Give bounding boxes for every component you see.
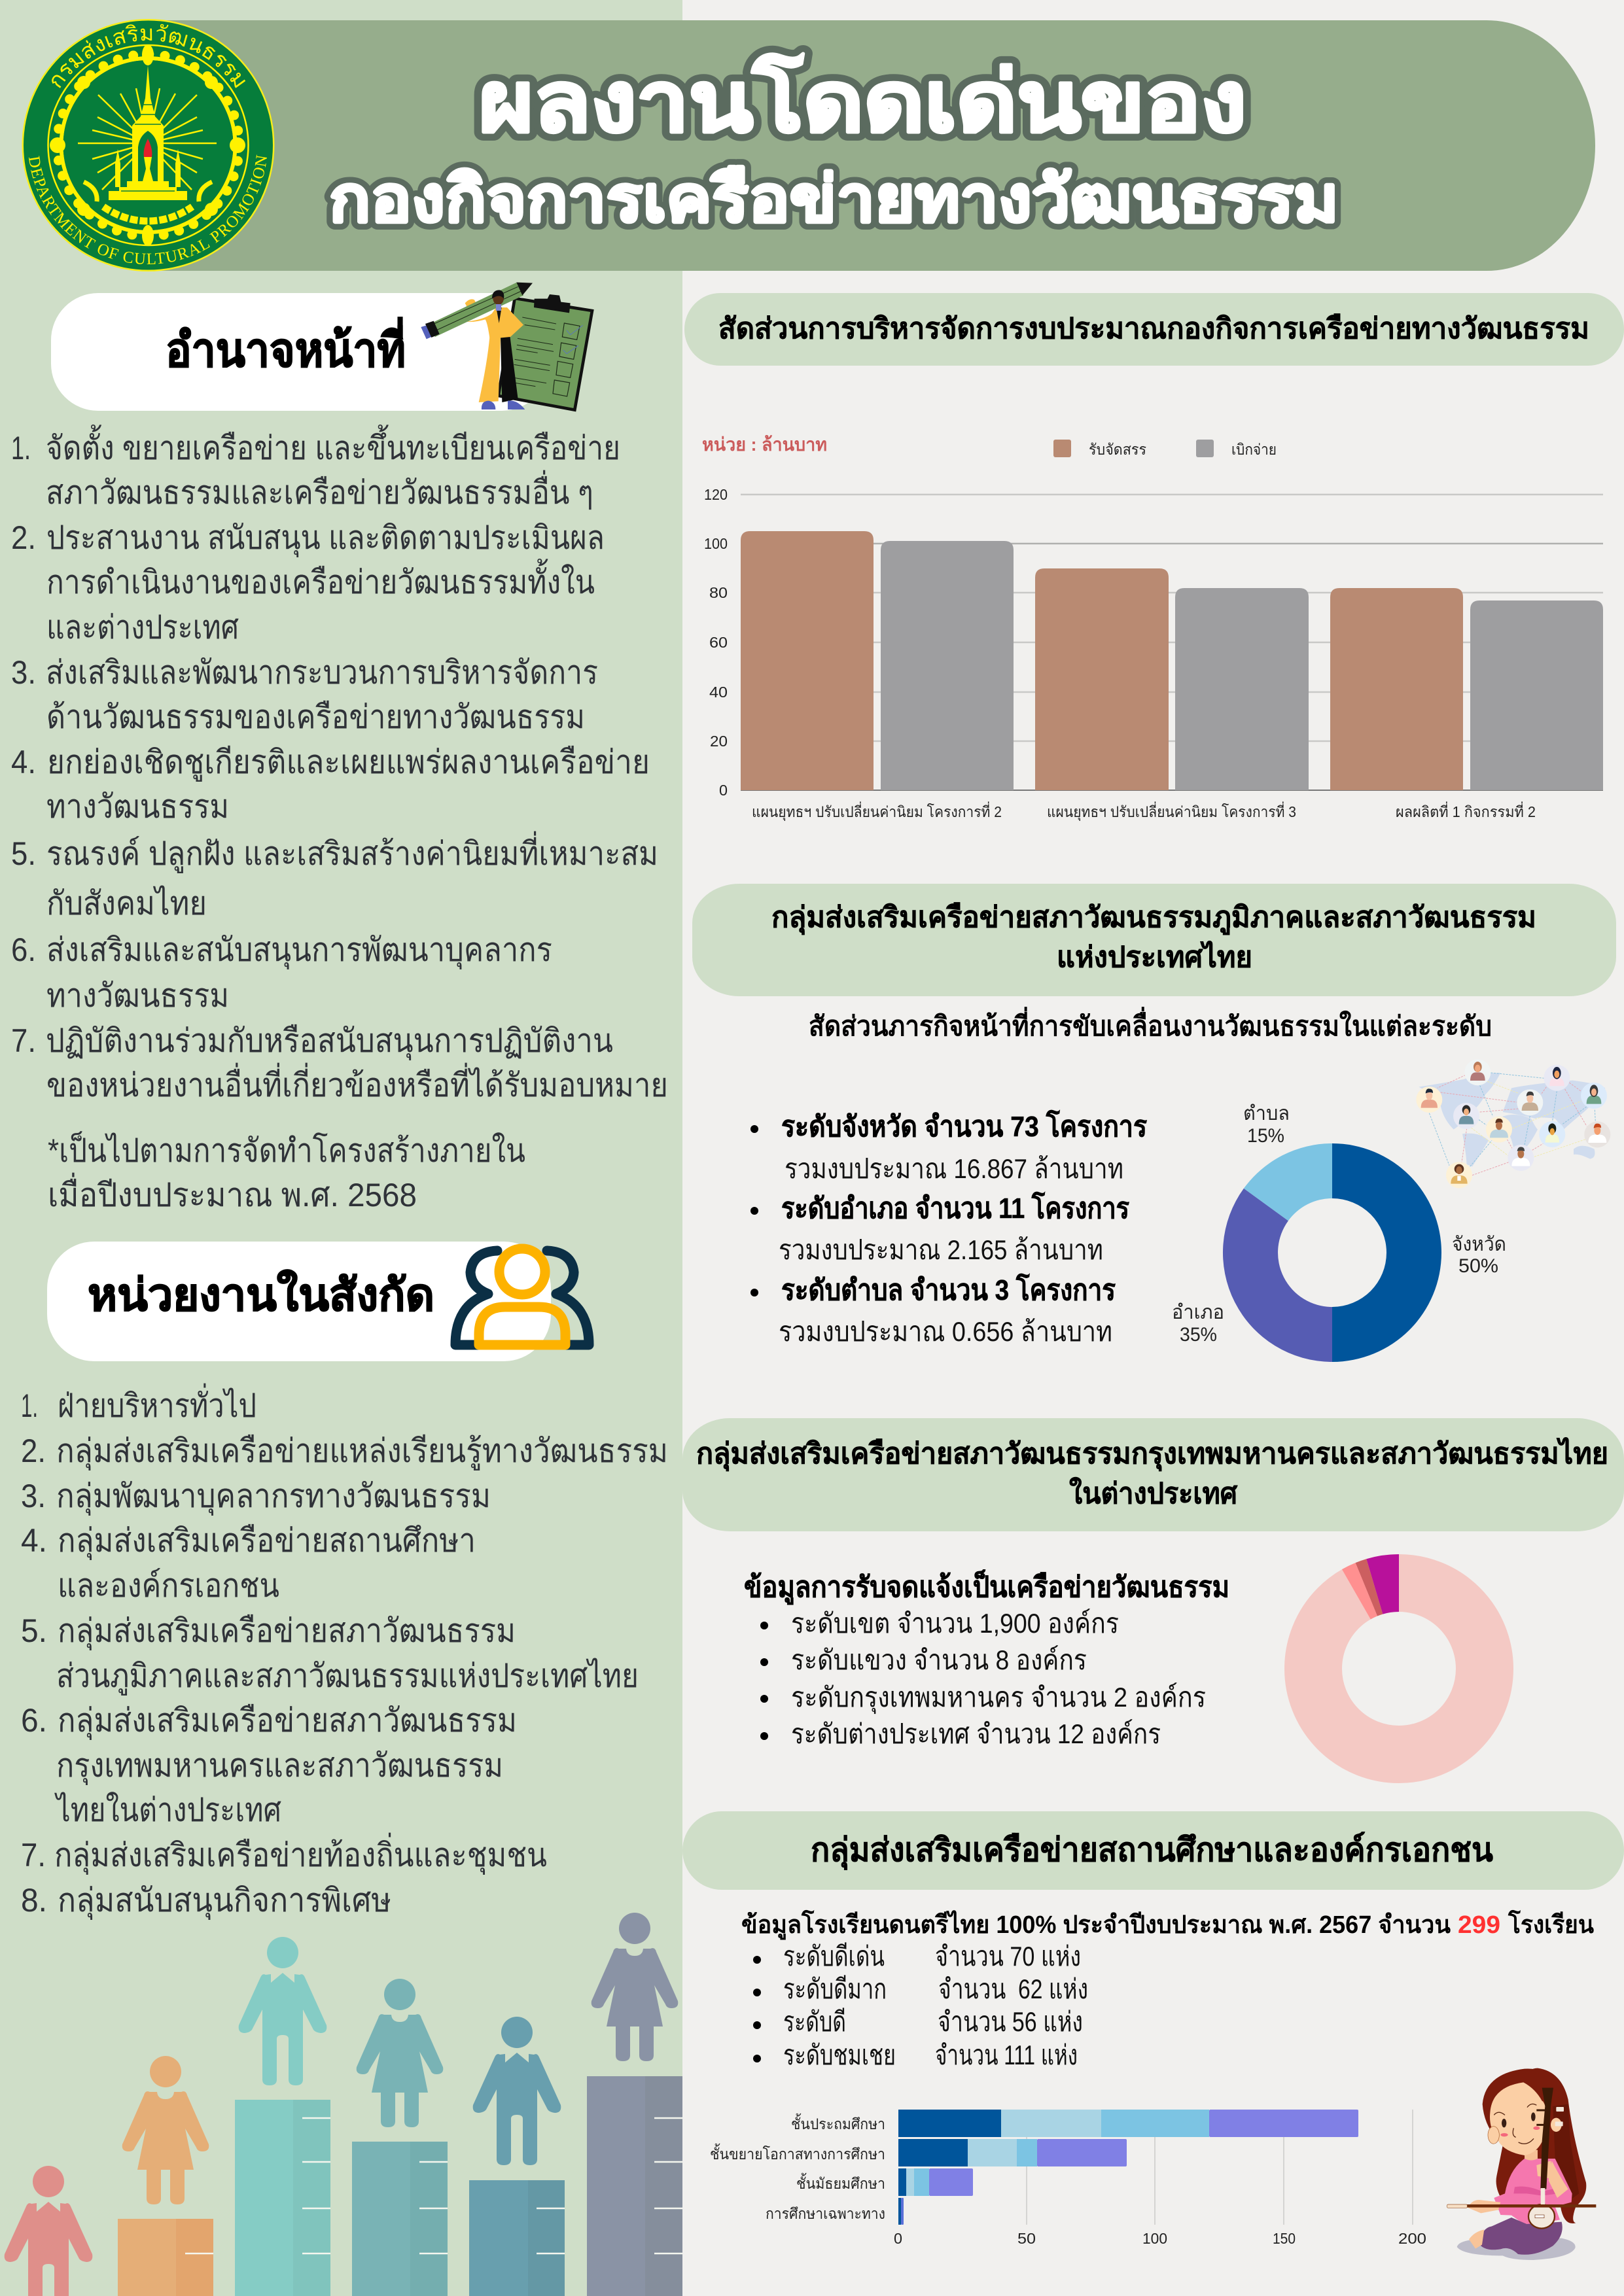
heading: schools and private organizations group: กลุ่มส่งเสริมเครือข่ายสถานศึกษาและองค์กรเอกชน: [811, 1832, 1493, 1870]
chart: donut of levels: 35%: [1180, 1324, 1217, 1346]
title: ผลงานโดดเด่นของ: [479, 53, 1246, 149]
text block: projects by level: ระดับอำเภอ จำนวน 11 โครงการ: [781, 1191, 1129, 1225]
text block: list of powers and duties: กับสังคมไทย: [46, 885, 207, 922]
bar: secondary: [898, 2168, 973, 2196]
text block: Thai music schools data: จำนวน 56 แห่ง: [938, 2006, 1083, 2037]
text block: list of subordinate units: กลุ่มส่งเสริมเครือข่ายสถานศึกษา: [58, 1522, 476, 1560]
panel: powers heading pill: อำนาจหน้าที่: [166, 317, 406, 377]
text block: Thai music schools data: โรงเรียน: [1508, 1909, 1594, 1939]
text block: Thai music schools data: ระดับดี: [783, 2006, 846, 2037]
text block: Thai music schools data: จำนวน 70 แห่ง: [935, 1941, 1081, 1972]
bar: primary: [898, 2110, 1358, 2137]
note: restructuring footnote: [48, 1131, 525, 1213]
text block: list of powers and duties: สภาวัฒนธรรมและเครือข่ายวัฒนธรรมอื่น ๆ: [46, 470, 593, 511]
text block: list of subordinate units: กลุ่มส่งเสริมเครือข่ายท้องถิ่นและชุมชน: [54, 1833, 547, 1875]
x axis labels: แผนยุทธฯ ปรับเปลี่ยนค่านิยม โครงการที่ 3: [1047, 801, 1296, 821]
text block: list of subordinate units: กลุ่มส่งเสริมเครือข่ายแหล่งเรียนรู้ทางวัฒนธรรม: [56, 1433, 668, 1470]
text block: projects by level: ระดับตำบล จำนวน 3 โครงการ: [781, 1272, 1116, 1306]
text block: Thai music schools data: ระดับชมเชย: [783, 2040, 896, 2070]
text block: list of powers and duties: รณรงค์ ปลูกฝัง และเสริมสร้างค่านิยมที่เหมาะสม: [46, 831, 658, 873]
legend: รับจัดสรร: [1089, 441, 1146, 458]
text block: list of subordinate units: ไทยในต่างประเทศ: [54, 1792, 281, 1828]
chart: stacked bars of schools by education level: [710, 2110, 1426, 2247]
legend: [1053, 440, 1277, 458]
text block: list of subordinate units: 2.: [21, 1433, 46, 1469]
chart: donut of registered networks: [1313, 1554, 1485, 1754]
text block: projects by level: ระดับจังหวัด จำนวน 73 โครงการ: [781, 1109, 1147, 1143]
panel: powers heading pill: [51, 293, 549, 411]
text block: projects by level: รวมงบประมาณ 0.656 ล้านบาท: [779, 1316, 1112, 1347]
text block: list of powers and duties: ของหน่วยงานอื่นที่เกี่ยวข้องหรือที่ได้รับมอบหมาย: [46, 1063, 668, 1104]
text block: list of powers and duties: จัดตั้ง ขยายเครือข่าย และขึ้นทะเบียนเครือข่าย: [46, 425, 620, 466]
category labels: [710, 2113, 885, 2222]
text block: list of subordinate units: กลุ่มส่งเสริมเครือข่ายสภาวัฒนธรรม: [58, 1612, 516, 1650]
text block: list of subordinate units: กรุงเทพมหานครและสภาวัฒนธรรม: [56, 1747, 503, 1785]
heading: bangkok and overseas cultural councils group: กลุ่มส่งเสริมเครือข่ายสภาวัฒนธรรมกรุงเทพมหานครและสภาวัฒนธรรมไทย: [696, 1436, 1608, 1472]
text block: list of powers and duties: 2.: [11, 519, 36, 556]
heading: budget management: [684, 293, 1624, 366]
text block: registered cultural networks: ข้อมูลการรับจดแจ้งเป็นเครือข่ายวัฒนธรรม: [744, 1569, 1229, 1605]
illustration: people standing on rising bars: [5, 1913, 682, 2296]
text block: list of powers and duties: ประสานงาน สนับสนุน และติดตามประเมินผล: [46, 519, 605, 557]
text block: registered cultural networks: ระดับกรุงเทพมหานคร จำนวน 2 องค์กร: [791, 1682, 1206, 1714]
text block: list of subordinate units: กลุ่มพัฒนาบุคลากรทางวัฒนธรรม: [56, 1478, 491, 1516]
logo: department of cultural promotion seal: DEPARTMENT OF CULTURAL PROMOTION: [29, 154, 267, 264]
text block: Thai music schools data: จำนวน 111 แห่ง: [935, 2040, 1078, 2070]
y axis labels: 120: [704, 486, 728, 503]
heading: budget management: สัดส่วนการบริหารจัดการงบประมาณกองกิจการเครือข่ายทางวัฒนธรรม: [718, 313, 1589, 345]
text block: list of powers and duties: การดำเนินงานของเครือข่ายวัฒนธรรมทั้งใน: [46, 559, 595, 600]
category labels: ชั้นประถมศึกษา: [791, 2113, 885, 2132]
subheading: mission share by level: สัดส่วนภารกิจหน้าที่การขับเคลื่อนงานวัฒนธรรมในแต่ละระดับ: [809, 1007, 1492, 1041]
title: [329, 53, 1339, 235]
value axis labels: 0: [894, 2230, 902, 2247]
text block: list of subordinate units: ฝ่ายบริหารทั่วไป: [58, 1383, 256, 1424]
note: restructuring footnote: เมื่อปีงบประมาณ พ.ศ. 2568: [48, 1173, 417, 1213]
y axis labels: [704, 486, 728, 799]
x axis labels: ผลผลิตที่ 1 กิจกรรมที่ 2: [1396, 801, 1536, 820]
text block: list of powers and duties: 1.: [11, 430, 31, 466]
value axis labels: 150: [1273, 2230, 1296, 2247]
text block: list of powers and duties: ด้านวัฒนธรรมของเครือข่ายทางวัฒนธรรม: [46, 699, 585, 735]
chart: donut of levels: ตำบล: [1243, 1103, 1290, 1124]
text block: list of subordinate units: 5.: [21, 1612, 47, 1649]
text block: list of powers and duties: 3.: [11, 654, 36, 691]
title: กองกิจการเครือข่ายทางวัฒนธรรม: [329, 163, 1339, 235]
y axis labels: 100: [704, 535, 728, 552]
text block: list of subordinate units: กลุ่มส่งเสริมเครือข่ายสภาวัฒนธรรม: [58, 1702, 517, 1740]
text block: list of subordinate units: 8.: [21, 1882, 47, 1919]
text block: list of subordinate units: 6.: [21, 1702, 47, 1739]
text block: registered cultural networks: ระดับเขต จำนวน 1,900 องค์กร: [791, 1608, 1119, 1639]
chart: donut of levels: 15%: [1247, 1125, 1284, 1147]
text block: Thai music schools data: [741, 1909, 1594, 2070]
legend: เบิกจ่าย: [1231, 441, 1277, 458]
bar: extended opportunity: [898, 2139, 1127, 2166]
text block: list of subordinate units: 1.: [21, 1387, 38, 1424]
y axis labels: 20: [710, 733, 728, 750]
category labels: ชั้นมัธยมศึกษา: [796, 2173, 885, 2192]
text block: list of powers and duties: ส่งเสริมและพัฒนากระบวนการบริหารจัดการ: [46, 654, 598, 691]
illustration: people network on world map: [1416, 1059, 1610, 1188]
text block: list of subordinate units: [21, 1383, 668, 1920]
heading: bangkok and overseas cultural councils group: ในต่างประเทศ: [1069, 1476, 1238, 1510]
panel: subordinate units heading pill: [47, 1242, 551, 1361]
chart: donut of levels: 50%: [1458, 1255, 1498, 1277]
text block: Thai music schools data: จำนวน 62 แห่ง: [938, 1974, 1088, 2004]
text block: list of powers and duties: ทางวัฒนธรรม: [46, 977, 229, 1014]
heading: bangkok and overseas cultural councils group: [682, 1418, 1624, 1531]
value axis labels: [894, 2230, 1426, 2247]
text block: Thai music schools data: ระดับดีมาก: [783, 1974, 887, 2004]
value axis labels: 100: [1142, 2230, 1167, 2247]
category labels: การศึกษาเฉพาะทาง: [766, 2205, 885, 2222]
header banner: [148, 20, 1595, 271]
text block: list of powers and duties: ยกย่องเชิดชูเกียรติและเผยแพร่ผลงานเครือข่าย: [47, 744, 650, 782]
text block: Thai music schools data: ระดับดีเด่น: [783, 1941, 885, 1972]
chart: donut of levels: อำเภอ: [1172, 1302, 1224, 1323]
chart: donut of levels: จังหวัด: [1452, 1234, 1506, 1255]
text block: list of subordinate units: 7.: [21, 1837, 46, 1873]
text block: registered cultural networks: ระดับแขวง จำนวน 8 องค์กร: [791, 1644, 1087, 1675]
text block: list of powers and duties: 4.: [11, 744, 36, 780]
text block: list of powers and duties: ปฏิบัติงานร่วมกับหรือสนับสนุนการปฏิบัติงาน: [46, 1022, 613, 1060]
text block: list of powers and duties: ส่งเสริมและสนับสนุนการพัฒนาบุคลากร: [46, 931, 552, 969]
text block: list of subordinate units: และองค์กรเอกชน: [58, 1567, 279, 1604]
y axis labels: 80: [709, 584, 728, 601]
y axis labels: 40: [709, 684, 728, 701]
text block: Thai music schools data: ข้อมูลโรงเรียนดนตรีไทย 100% ประจำปีงบประมาณ พ.ศ. 2567 จำนวน: [741, 1909, 1451, 1940]
panel: subordinate units heading pill: หน่วยงานในสังกัด: [88, 1269, 434, 1320]
chart: budget bar chart: [702, 434, 1603, 821]
heading: regional cultural councils group: กลุ่มส่งเสริมเครือข่ายสภาวัฒนธรรมภูมิภาคและสภาวัฒนธรรม: [771, 901, 1536, 935]
value axis labels: 200: [1398, 2230, 1426, 2247]
bar: specialised: [898, 2198, 904, 2225]
logo: department of cultural promotion seal: กรมส่งเสริมวัฒนธรรม: [52, 24, 246, 88]
bars: [741, 531, 1603, 790]
text block: list of powers and duties: 5.: [11, 835, 36, 872]
value axis labels: 50: [1017, 2230, 1036, 2247]
title: ผลงานโดดเด่นของ: [479, 53, 1246, 149]
text block: registered cultural networks: [744, 1569, 1229, 1749]
text block: list of powers and duties: และต่างประเทศ: [46, 609, 239, 646]
text block: list of powers and duties: 6.: [11, 931, 36, 968]
text block: list of powers and duties: ทางวัฒนธรรม: [46, 788, 229, 825]
logo: department of cultural promotion seal: [22, 19, 275, 271]
y axis labels: 0: [719, 782, 728, 799]
note: restructuring footnote: *เป็นไปตามการจัดทำโครงสร้างภายใน: [48, 1131, 525, 1169]
y axis labels: 60: [709, 634, 728, 651]
text block: list of subordinate units: ส่วนภูมิภาคและสภาวัฒนธรรมแห่งประเทศไทย: [56, 1658, 639, 1696]
category labels: ชั้นขยายโอกาสทางการศึกษา: [710, 2144, 885, 2163]
illustration: girl playing Thai fiddle: [1447, 2068, 1596, 2260]
text block: list of subordinate units: 3.: [21, 1478, 46, 1514]
heading: regional cultural councils group: แห่งประเทศไทย: [1057, 940, 1252, 973]
text block: list of powers and duties: [11, 425, 668, 1104]
text block: list of subordinate units: กลุ่มสนับสนุนกิจการพิเศษ: [58, 1882, 391, 1920]
heading: schools and private organizations group: [682, 1811, 1624, 1890]
text block: list of powers and duties: 7.: [11, 1022, 36, 1059]
heading: regional cultural councils group: [692, 884, 1616, 996]
x axis labels: แผนยุทธฯ ปรับเปลี่ยนค่านิยม โครงการที่ 2: [752, 801, 1002, 821]
x axis labels: [752, 801, 1536, 821]
text block: Thai music schools data: 299: [1458, 1911, 1500, 1939]
text block: registered cultural networks: ระดับต่างประเทศ จำนวน 12 องค์กร: [791, 1718, 1161, 1749]
text block: projects by level: [750, 1109, 1147, 1347]
title: กองกิจการเครือข่ายทางวัฒนธรรม: [329, 163, 1339, 235]
text block: list of subordinate units: 4.: [21, 1522, 47, 1559]
icon: person with pencil and clipboard: [421, 283, 592, 410]
text block: projects by level: รวมงบประมาณ 2.165 ล้านบาท: [779, 1234, 1103, 1265]
icon: group of people: [455, 1249, 589, 1345]
text block: projects by level: รวมงบประมาณ 16.867 ล้านบาท: [785, 1153, 1123, 1184]
chart: donut of levels: [1172, 1103, 1506, 1362]
unit label: หน่วย : ล้านบาท: [702, 434, 827, 455]
